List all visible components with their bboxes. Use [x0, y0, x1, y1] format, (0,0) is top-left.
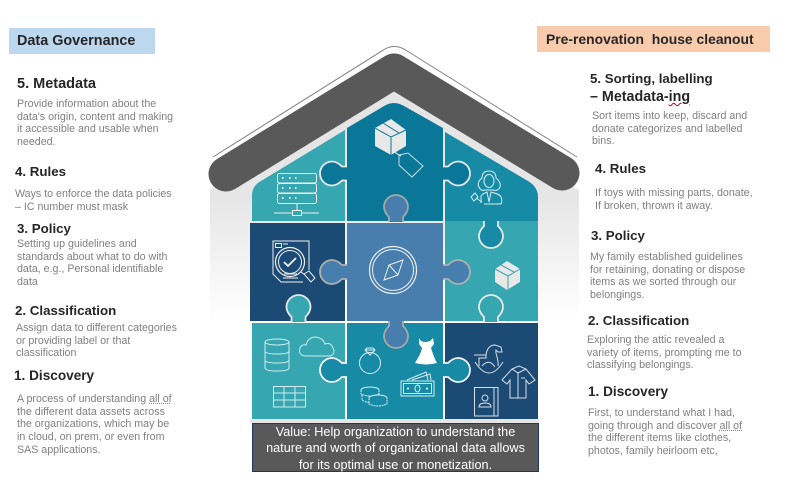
icon: book — [474, 388, 498, 416]
left: metadata text: data's origin, content and making — [17, 111, 173, 123]
heading: Data Governance — [9, 28, 155, 54]
left: classification text: or providing label or that — [16, 335, 130, 347]
icon: ring — [360, 348, 380, 374]
piece: top middle — [347, 103, 443, 221]
icon: document with magnifier — [273, 241, 315, 282]
left: rules text: Ways to enforce the data policies — [15, 188, 172, 200]
icon: server — [274, 174, 319, 216]
piece: bottom left — [252, 323, 345, 419]
right: rules text: If toys with missing parts, donate, — [595, 187, 753, 199]
right: policy text: for retaining, donating or dispose — [590, 264, 745, 276]
left: metadata text: needed. — [17, 136, 56, 148]
left: rules heading: 4. Rules — [15, 164, 66, 179]
left: classification text: classification — [16, 347, 76, 359]
heading: Pre-renovation house cleanout — [537, 26, 770, 52]
left: discovery text — [17, 393, 172, 456]
left: discovery text: in cloud, on prem, or even from — [17, 431, 164, 443]
roof outline — [213, 46, 577, 157]
left: metadata text — [17, 98, 173, 148]
right: metadata text: donate categorizes and labelled — [592, 123, 742, 135]
right: discovery text: going through and discover all of — [588, 420, 742, 432]
right: discovery text — [588, 407, 742, 457]
value callout: for its optimal use or monetization. — [299, 458, 492, 472]
left: metadata text: it accessible and usable when — [17, 123, 159, 135]
right: metadata heading — [590, 71, 713, 106]
value callout: nature and worth of organizational data allows — [266, 441, 525, 455]
piece: top right — [445, 132, 538, 221]
right: policy heading: 3. Policy — [591, 228, 645, 243]
left: rules text: – IC number must mask — [15, 201, 128, 213]
piece: middle left — [250, 223, 345, 321]
right: discovery text: the different items like clothes, — [588, 432, 731, 444]
left: metadata heading: 5. Metadata — [17, 76, 96, 92]
left: discovery heading: 1. Discovery — [14, 368, 94, 383]
left: policy text: data, e.g., Personal identifiable — [17, 263, 163, 275]
piece: bottom middle — [347, 323, 443, 419]
value callout — [252, 423, 539, 472]
icon: dress — [415, 338, 437, 364]
icon: box — [495, 261, 520, 290]
icon: database — [265, 339, 289, 371]
left: discovery text: A process of understanding all of — [17, 393, 172, 405]
icon: shirt — [502, 366, 535, 398]
right: policy text: items as we sorted through our — [590, 276, 736, 288]
piece: top left — [252, 130, 345, 221]
piece: middle right — [445, 221, 538, 321]
left: discovery text: the different data assets across — [17, 406, 165, 418]
left: policy text: standards about what to do with — [17, 251, 167, 263]
right: policy text — [590, 251, 745, 301]
house wall — [210, 85, 579, 320]
right: metadata text: Sort items into keep, discard and — [592, 110, 747, 122]
icon: cloud — [300, 337, 334, 356]
icon: table — [273, 386, 306, 407]
right: classification text: classifying belongings. — [587, 359, 694, 371]
right: policy text: belongings. — [590, 289, 645, 301]
left: classification text: Assign data to different categories — [16, 322, 177, 334]
right: classification heading: 2. Classification — [588, 313, 689, 328]
left: classification heading: 2. Classification — [15, 303, 116, 318]
heading: Pre-renovation house cleanout: Pre-renovation house cleanout — [546, 31, 754, 47]
right: discovery text: First, to understand what I had, — [588, 407, 735, 419]
right: rules text: If broken, thrown it away. — [595, 200, 713, 212]
icon: cash — [401, 372, 434, 396]
value callout: Value: Help organization to understand the — [276, 425, 515, 439]
left: policy heading: 3. Policy — [17, 221, 71, 236]
icon: rocking horse — [474, 345, 503, 373]
piece: bottom right — [445, 323, 538, 419]
icon: lawyer — [471, 171, 502, 204]
puzzle tabs — [286, 162, 503, 382]
right: metadata heading: – Metadata-ing — [590, 89, 690, 105]
left: policy text: data — [17, 276, 38, 288]
right: discovery text: photos, family heirloom etc, — [588, 445, 718, 457]
roof — [226, 71, 562, 174]
heading: Data Governance: Data Governance — [17, 33, 135, 49]
right: metadata heading: 5. Sorting, labelling — [590, 71, 713, 86]
right: metadata text — [592, 110, 747, 147]
left: discovery text: SAS applications. — [17, 444, 101, 456]
icon: coins — [361, 387, 387, 406]
right: classification text — [587, 334, 742, 371]
right: classification text: variety of items, prompting me to — [587, 347, 742, 359]
right: policy text: My family established guidelines — [590, 251, 743, 263]
right: discovery heading: 1. Discovery — [588, 384, 668, 399]
left: policy text — [17, 238, 167, 288]
left: rules text — [15, 188, 172, 213]
left: metadata text: Provide information about the — [17, 98, 156, 110]
right: classification text: Exploring the attic revealed a — [587, 334, 724, 346]
left: discovery text: the organizations, which may be — [17, 418, 169, 430]
right: metadata text: bins. — [592, 135, 615, 147]
icon: box with tag — [375, 119, 423, 177]
piece: center — [347, 223, 443, 321]
icon: compass — [370, 246, 416, 294]
left: classification text — [16, 322, 177, 359]
puzzle pieces — [250, 103, 539, 423]
left: policy text: Setting up guidelines and — [17, 238, 137, 250]
right: rules text — [595, 187, 753, 212]
right: rules heading: 4. Rules — [595, 161, 646, 176]
